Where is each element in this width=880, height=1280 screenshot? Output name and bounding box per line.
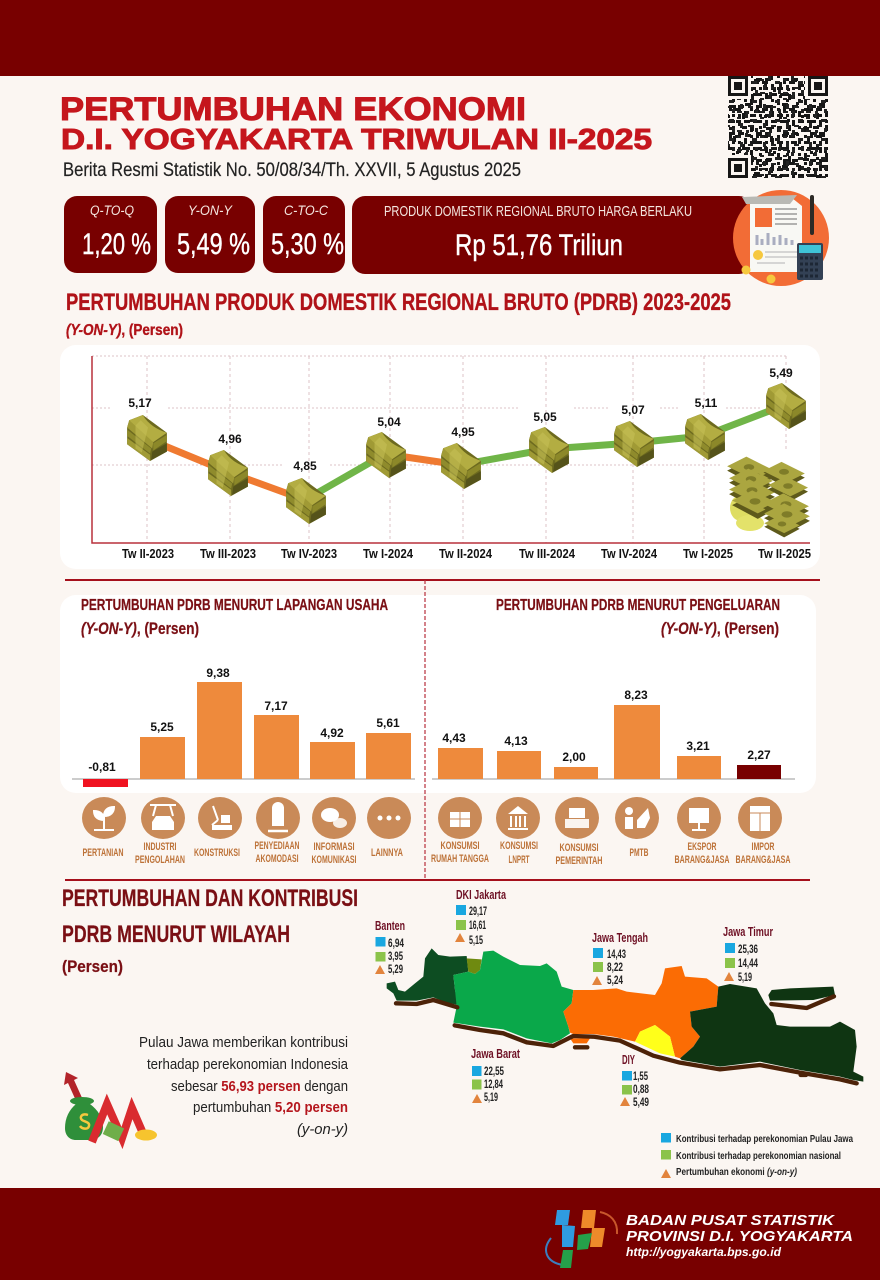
icon: industri pengolahan — [135, 797, 185, 866]
footer text — [626, 1212, 853, 1259]
label: DIY: 5,49 — [633, 1095, 649, 1109]
bar chart: expenditure — [432, 688, 795, 779]
icon: konstruksi: KONSTRUKSI — [194, 847, 240, 859]
province: Jawa Tengah — [563, 966, 718, 1058]
label: Jawa Timur: 14,44 — [738, 956, 758, 970]
label: Banten — [375, 918, 405, 976]
icon: pertanian: PERTANIAN — [82, 847, 124, 859]
label: DKI Jakarta: DKI Jakarta — [456, 887, 507, 902]
data labels: 5,11 — [695, 396, 718, 410]
label: Banten: 3,95 — [388, 949, 403, 963]
x axis labels: Tw III-2023 — [200, 546, 256, 561]
label: DIY: 0,88 — [633, 1082, 649, 1096]
icon: konsumsi LNPRT — [496, 797, 540, 866]
label: DKI Jakarta: 5,15 — [469, 933, 483, 947]
subtitle: Berita Resmi Statistik No. 50/08/34/Th. XXVII, 5 Agustus 2025 — [63, 160, 521, 181]
data labels: 5,04 — [377, 415, 401, 429]
data labels: 5,49 — [769, 366, 793, 380]
x axis labels: Tw III-2024 — [519, 546, 576, 561]
heading: regional: PDRB MENURUT WILAYAH — [62, 921, 290, 948]
callout text: sebesar 56,93 persen dengan — [171, 1078, 348, 1095]
label: Jawa Tengah — [592, 930, 648, 987]
heading: regional: (Persen) — [62, 957, 123, 976]
KPI: y-on-y: Y-ON-Y — [188, 202, 234, 218]
panel: line chart — [60, 345, 820, 569]
title: PERTUMBUHAN EKONOMI — [60, 91, 526, 127]
title: D.I. YOGYAKARTA TRIWULAN II-2025 — [61, 124, 652, 156]
icon: konsumsi LNPRT: LNPRT — [508, 854, 530, 866]
icon: industri pengolahan: PENGOLAHAN — [135, 854, 185, 866]
label: DIY: DIY — [622, 1052, 635, 1067]
province: DIY — [635, 1025, 675, 1057]
footer text: PROVINSI D.I. YOGYAKARTA — [626, 1228, 853, 1245]
data labels: 5,17 — [128, 396, 152, 410]
icon: money pile — [727, 457, 810, 537]
label: Jawa Timur: Jawa Timur — [723, 924, 773, 939]
callout text: terhadap perekonomian Indonesia — [147, 1056, 349, 1073]
callout text: Pulau Jawa memberikan kontribusi — [139, 1034, 348, 1051]
icon: PMTB — [615, 797, 659, 859]
icon: PMTB: PMTB — [630, 847, 649, 859]
icon: lainnya: LAINNYA — [371, 847, 403, 859]
heading: by expenditure: (Y-ON-Y), (Persen) — [661, 619, 779, 638]
bar chart: expenditure: 4,13 — [504, 734, 528, 748]
icon: penyediaan akomodasi — [254, 797, 300, 865]
callout text — [139, 1034, 349, 1138]
icon: konsumsi rumah tangga — [431, 797, 489, 865]
heading: PDRB growth — [66, 289, 731, 339]
province: DKI Jakarta — [467, 958, 482, 974]
label: Banten: 6,94 — [388, 936, 404, 950]
bar chart: business field: 5,25 — [150, 720, 174, 734]
label: Banten: Banten — [375, 918, 405, 933]
bar chart: business field — [72, 666, 415, 787]
x axis labels: Tw I-2025 — [683, 546, 733, 561]
KPI: PDRB value — [352, 196, 752, 274]
bar chart: business field: -0,81 — [88, 760, 116, 774]
heading: regional — [62, 885, 358, 976]
KPI: PDRB value: PRODUK DOMESTIK REGIONAL BRUTO HARGA BERLAKU — [384, 203, 692, 220]
label: DIY — [620, 1052, 649, 1109]
icon: industri pengolahan: INDUSTRI — [144, 841, 176, 853]
icon: penyediaan akomodasi: AKOMODASI — [256, 853, 298, 865]
icon: penyediaan akomodasi: PENYEDIAAN — [254, 840, 300, 852]
heading: PDRB growth: (Y-ON-Y), (Persen) — [66, 322, 183, 339]
bar chart: business field: 7,17 — [264, 699, 288, 713]
label: Jawa Timur: 25,36 — [738, 942, 758, 956]
footer text: BADAN PUSAT STATISTIK — [626, 1212, 835, 1229]
label: Jawa Barat: 22,55 — [484, 1064, 504, 1078]
KPI: q-to-q — [64, 196, 157, 273]
icon: konsumsi pemerintah — [555, 797, 603, 867]
label: DIY: 1,55 — [633, 1069, 648, 1083]
x axis labels: Tw IV-2023 — [281, 546, 337, 561]
label: DKI Jakarta: 16,61 — [469, 918, 486, 932]
icon: konsumsi rumah tangga: KONSUMSI — [440, 840, 480, 852]
x axis labels: Tw II-2024 — [439, 546, 493, 561]
money stack markers — [127, 383, 806, 524]
panel: bar charts background — [60, 595, 816, 793]
label: DKI Jakarta: 29,17 — [469, 904, 487, 918]
top banner — [0, 0, 880, 76]
data labels: 4,96 — [218, 432, 242, 446]
icon: impor: IMPOR — [752, 841, 775, 853]
label: Jawa Tengah: Jawa Tengah — [592, 930, 648, 945]
icon: BPS logo — [546, 1210, 617, 1268]
footer text: http://yogyakarta.bps.go.id — [626, 1245, 782, 1259]
line segments — [160, 405, 785, 500]
bar chart: expenditure: 3,21 — [686, 739, 710, 753]
bar chart: expenditure: 4,43 — [442, 731, 466, 745]
KPI: c-to-c: 5,30 % — [271, 228, 344, 261]
KPI: c-to-c — [263, 196, 345, 273]
x axis labels: Tw IV-2024 — [601, 546, 658, 561]
icon: report and calculator — [733, 190, 829, 286]
province: Jawa Timur — [680, 984, 863, 1082]
province: Banten — [387, 948, 468, 1005]
bar chart: business field: 4,92 — [320, 726, 344, 740]
icon: ekspor — [674, 797, 730, 866]
KPI: y-on-y: 5,49 % — [177, 228, 250, 261]
callout text: pertumbuhan 5,20 persen — [193, 1099, 348, 1116]
icon: ekspor: BARANG&JASA — [674, 854, 730, 866]
legend: Kontribusi terhadap perekonomian nasional — [676, 1151, 841, 1162]
icon: konsumsi pemerintah: KONSUMSI — [560, 842, 598, 854]
callout text: (y-on-y) — [297, 1121, 348, 1138]
label: Jawa Tengah: 5,24 — [607, 973, 623, 987]
icon: impor — [736, 797, 791, 866]
data labels: 5,07 — [621, 403, 645, 417]
KPI: q-to-q: Q-TO-Q — [90, 202, 134, 218]
label: DKI Jakarta — [455, 887, 507, 947]
icon: konstruksi — [194, 797, 242, 859]
data labels — [128, 366, 793, 473]
icon: pertanian — [82, 797, 126, 859]
heading: by expenditure — [496, 597, 780, 638]
KPI: q-to-q: 1,20 % — [82, 228, 151, 261]
data labels: 5,05 — [533, 410, 557, 424]
icon: impor: BARANG&JASA — [736, 854, 791, 866]
heading: by business field: PERTUMBUHAN PDRB MENURUT LAPANGAN USAHA — [81, 597, 388, 614]
label: Jawa Timur: 5,19 — [738, 970, 752, 984]
icon: konsumsi rumah tangga: RUMAH TANGGA — [431, 853, 489, 865]
heading: by business field — [81, 597, 388, 638]
title — [60, 91, 652, 156]
icon: informasi komunikasi: INFORMASI — [314, 841, 354, 853]
x axis labels: Tw II-2025 — [758, 546, 811, 561]
icon: konsumsi pemerintah: PEMERINTAH — [556, 855, 603, 867]
x axis labels — [122, 546, 811, 561]
bar chart: expenditure: 2,27 — [747, 748, 771, 762]
KPI: y-on-y — [165, 196, 255, 273]
x axis labels: Tw I-2024 — [363, 546, 414, 561]
label: Jawa Tengah: 8,22 — [607, 960, 623, 974]
map shadow — [396, 996, 857, 1083]
KPI: c-to-c: C-TO-C — [284, 202, 329, 218]
legend — [661, 1133, 853, 1178]
bar chart: expenditure: 8,23 — [624, 688, 648, 702]
icon: informasi komunikasi: KOMUNIKASI — [312, 854, 356, 866]
chart grid and axes — [92, 356, 810, 543]
icon: lainnya — [367, 797, 411, 859]
heading: regional: PERTUMBUHAN DAN KONTRIBUSI — [62, 885, 358, 912]
icon: ekspor: EKSPOR — [688, 841, 717, 853]
legend: Pertumbuhan ekonomi (y-on-y) — [676, 1167, 798, 1178]
bar chart: expenditure: 2,00 — [562, 750, 586, 764]
data labels: 4,85 — [293, 459, 317, 473]
bar chart: business field: 5,61 — [376, 716, 400, 730]
label: Jawa Barat: 12,84 — [484, 1077, 503, 1091]
icon: konsumsi LNPRT: KONSUMSI — [500, 840, 538, 852]
label: Banten: 5,29 — [388, 962, 403, 976]
QR code — [728, 76, 828, 178]
label: Jawa Timur — [723, 924, 773, 984]
data labels: 4,95 — [451, 425, 475, 439]
label: Jawa Barat — [471, 1046, 520, 1104]
footer band — [0, 1188, 880, 1280]
heading: by expenditure: PERTUMBUHAN PDRB MENURUT PENGELUARAN — [496, 597, 780, 614]
province: Jawa Barat — [453, 951, 573, 1043]
x axis labels: Tw II-2023 — [122, 546, 174, 561]
icon: growth money bag — [64, 1072, 157, 1142]
label: Jawa Barat: Jawa Barat — [471, 1046, 520, 1061]
bar chart: business field: 9,38 — [206, 666, 230, 680]
label: Jawa Barat: 5,19 — [484, 1090, 498, 1104]
heading: by business field: (Y-ON-Y), (Persen) — [81, 619, 199, 638]
KPI: PDRB value: Rp 51,76 Triliun — [455, 229, 623, 262]
label: Jawa Tengah: 14,43 — [607, 947, 626, 961]
icon: informasi komunikasi — [312, 797, 356, 866]
map: Java — [387, 948, 863, 1083]
